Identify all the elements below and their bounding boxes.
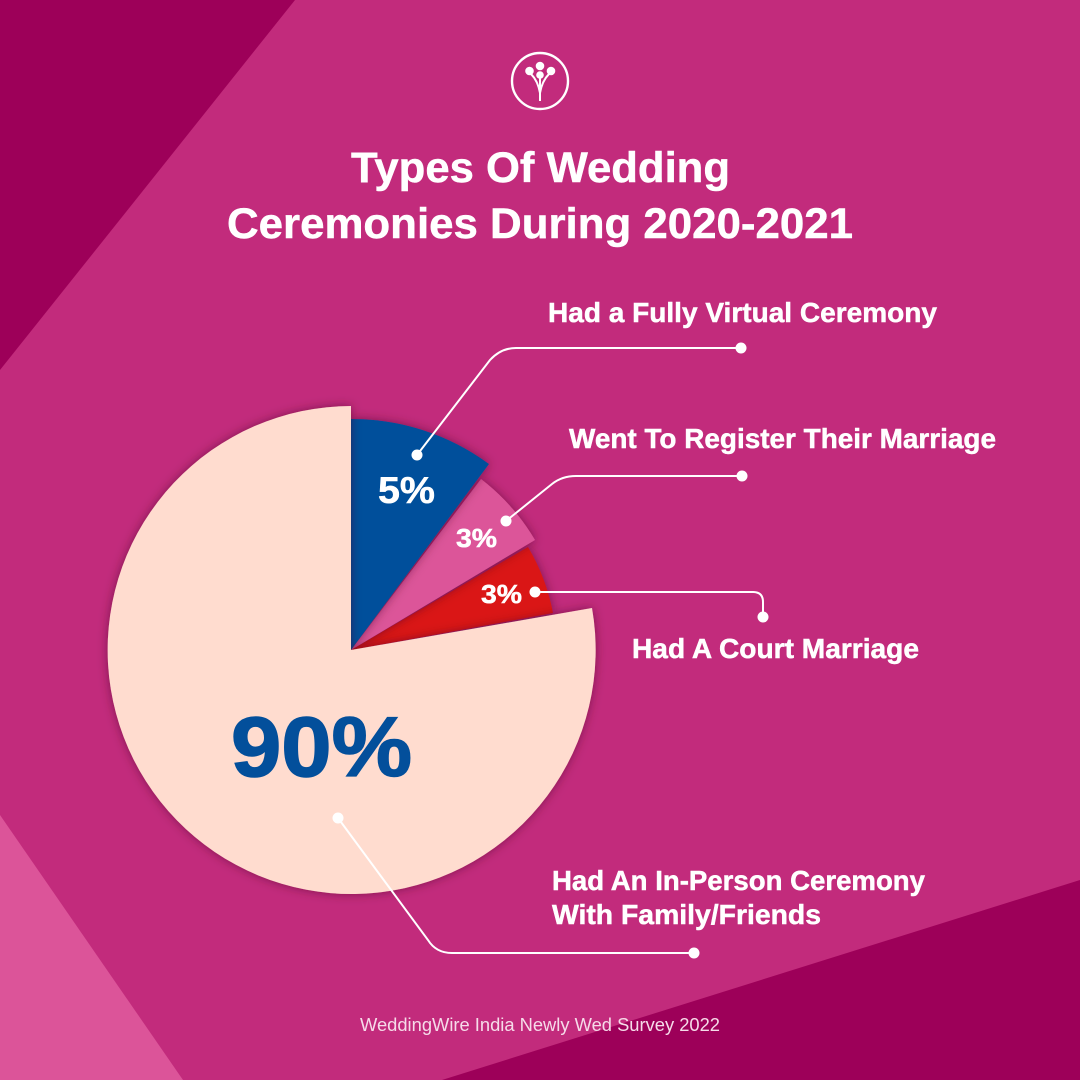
- label: virtual: Had a Fully Virtual Ceremony: [548, 297, 937, 328]
- title: [227, 144, 853, 248]
- slice: 90% in-person: [108, 406, 596, 894]
- label: register: Went To Register Their Marriage: [569, 423, 996, 454]
- label: in-person: [552, 865, 925, 930]
- slice: 5% virtual: [351, 419, 489, 650]
- connector: virtual: [412, 342, 746, 460]
- slice: 3% register: [351, 479, 535, 650]
- slice: 3% court: [351, 547, 553, 650]
- label: in-person: Had An In-Person Ceremony: [552, 865, 925, 896]
- value: 90%: 90%: [231, 700, 412, 794]
- value: 3% register: 3%: [456, 523, 497, 553]
- value: 3% court: 3%: [481, 579, 522, 609]
- title: Ceremonies During 2020-2021: [227, 200, 853, 248]
- title: Types Of Wedding: [351, 144, 730, 192]
- connector: court: [530, 586, 768, 622]
- label: in-person: With Family/Friends: [552, 899, 821, 930]
- label: court: Had A Court Marriage: [632, 633, 919, 664]
- pie chart: [108, 406, 596, 894]
- connector: in-person: [332, 812, 700, 958]
- value: 5%: 5%: [378, 470, 435, 511]
- source: WeddingWire India Newly Wed Survey 2022: [360, 1015, 720, 1035]
- connector: register: [500, 470, 748, 526]
- icon: bouquet logo: [512, 53, 568, 109]
